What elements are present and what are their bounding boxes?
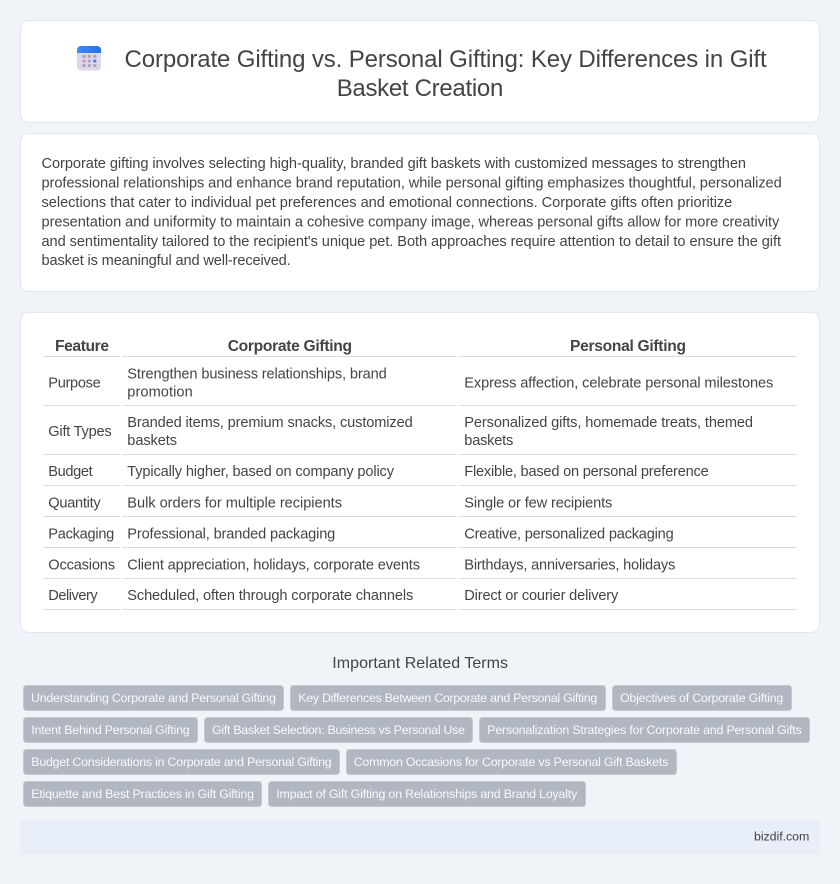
text block: summary paragraph: professional relationships and enhance brand reputation, while personal gifting emphasizes thoughtful, personalized [42, 176, 782, 192]
title [124, 46, 767, 102]
footer [20, 820, 820, 854]
row: budget: Flexible, based on personal preference [464, 464, 709, 480]
tag: Objectives of Corporate Gifting [620, 691, 783, 705]
row: budget [48, 464, 709, 480]
tag: Common Occasions for Corporate vs Personal Gift Baskets [354, 755, 668, 769]
tag: Key Differences Between Corporate and Personal Gifting [298, 691, 597, 705]
tag: Gift Basket Selection: Business vs Personal Use [212, 723, 465, 737]
row: delivery: Delivery [48, 588, 98, 604]
row: quantity: Single or few recipients [464, 495, 612, 511]
row: occasions [48, 557, 675, 573]
tag [612, 686, 792, 710]
row: budget: Budget [48, 464, 93, 480]
title: Basket Creation [337, 75, 503, 102]
tag: Intent Behind Personal Gifting [31, 723, 190, 737]
text block: summary paragraph [42, 156, 782, 269]
row: gift types: Personalized gifts, homemade treats, themed [464, 415, 753, 431]
tag [480, 718, 810, 742]
table header [55, 338, 686, 355]
tag: Impact of Gift Gifting on Relationships and Brand Loyalty [276, 787, 578, 801]
row: purpose [48, 366, 773, 400]
row: gift types: baskets [127, 433, 177, 449]
table header: Corporate Gifting [228, 338, 352, 355]
tag: Personalization Strategies for Corporate and Personal Gifts [487, 723, 802, 737]
row: packaging: Packaging [48, 526, 114, 542]
row: purpose: promotion [127, 384, 193, 400]
row: delivery [48, 588, 619, 604]
text block: summary paragraph: and sentimentality tailored to the recipient's unique pet. Both approaches require attention to detail to ensure the gift [42, 234, 781, 250]
row: gift types: Branded items, premium snacks, customized [127, 415, 413, 431]
row: delivery: Scheduled, often through corporate channels [127, 588, 413, 604]
table header: Feature [55, 338, 109, 355]
row: gift types [48, 415, 753, 449]
tag [204, 718, 472, 742]
tag [346, 750, 676, 774]
row: delivery: Direct or courier delivery [464, 588, 619, 604]
tag: Etiquette and Best Practices in Gift Gifting [31, 787, 254, 801]
tag [24, 718, 198, 742]
row: quantity: Quantity [48, 495, 101, 511]
row: packaging: Creative, personalized packaging [464, 526, 674, 542]
row: gift types: baskets [464, 433, 513, 449]
row: occasions: Client appreciation, holidays, corporate events [127, 557, 420, 573]
text block: summary paragraph: Corporate gifting involves selecting high-quality, branded gift baskets with customized messages to strengthen [42, 156, 746, 172]
tag [290, 686, 606, 710]
row: quantity: Bulk orders for multiple recipients [127, 495, 342, 511]
row: purpose: Express affection, celebrate personal milestones [464, 375, 773, 391]
tag list: related terms [24, 686, 810, 806]
row: purpose: Strengthen business relationships, brand [127, 366, 387, 382]
row: occasions: Occasions [48, 557, 115, 573]
text block: summary paragraph: selections that cater to individual pet preferences and emotional connections. Corporate gifts often prioritize [42, 195, 732, 211]
table header: Personal Gifting [570, 338, 686, 355]
tag: Understanding Corporate and Personal Gifting [31, 691, 276, 705]
tag [268, 782, 586, 806]
tag [24, 782, 262, 806]
panel: comparison table [20, 312, 820, 632]
row: occasions: Birthdays, anniversaries, holidays [464, 557, 675, 573]
row: quantity [48, 495, 612, 511]
row: packaging [48, 526, 674, 542]
row: purpose: Purpose [48, 375, 101, 391]
panel: title card [20, 20, 820, 122]
text block: summary paragraph: presentation and uniformity to maintain a cohesive company image, whereas personal gifts allow for more creativity [42, 215, 780, 231]
panel: summary text [20, 134, 820, 292]
icon: calendar [77, 46, 101, 70]
row: budget: Typically higher, based on company policy [127, 464, 395, 480]
tag [24, 686, 284, 710]
row: gift types: Gift Types [48, 424, 112, 440]
tag [24, 750, 340, 774]
footer: bizdif.com [754, 830, 809, 844]
title: Corporate Gifting vs. Personal Gifting: Key Differences in Gift [124, 46, 767, 73]
text block: summary paragraph: basket is meaningful and well-received. [42, 253, 291, 269]
heading: important related terms: Important Related Terms [332, 655, 508, 672]
tag: Budget Considerations in Corporate and Personal Gifting [31, 755, 332, 769]
row: packaging: Professional, branded packaging [127, 526, 335, 542]
